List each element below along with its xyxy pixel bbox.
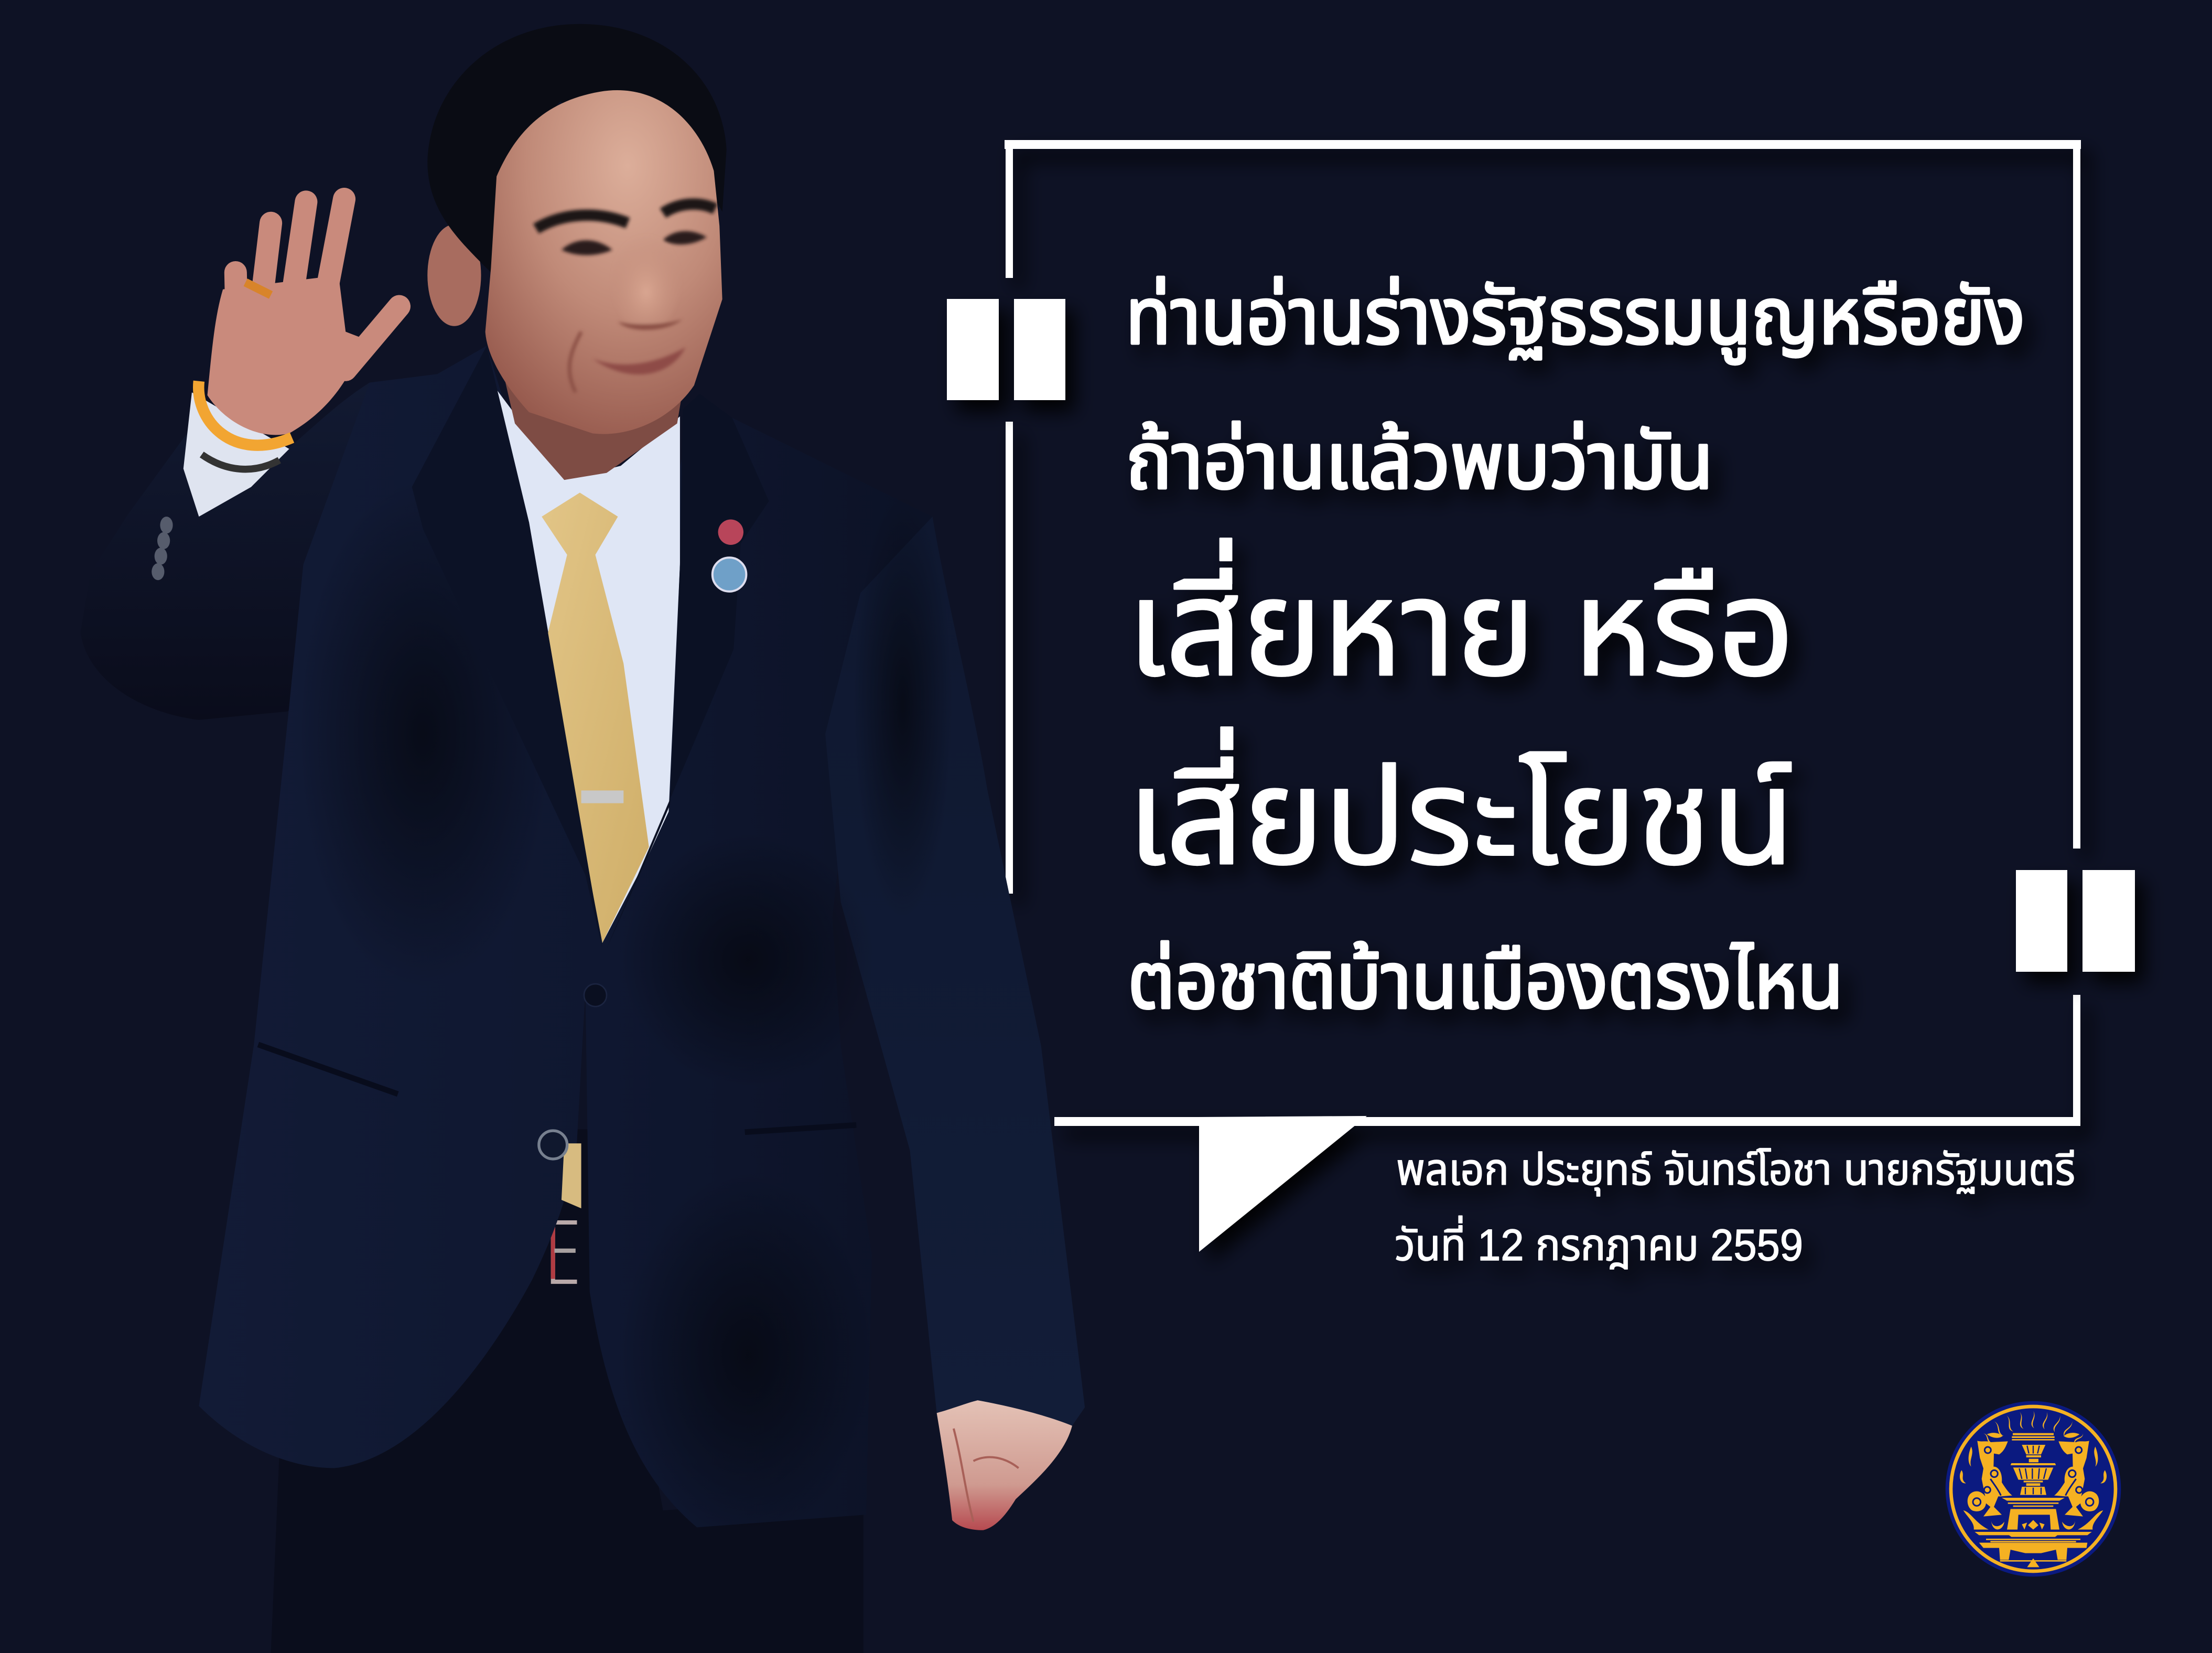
raised arm sleeve (80, 382, 451, 720)
right lapel (607, 394, 769, 949)
left eye (562, 240, 612, 255)
ring (245, 282, 271, 295)
seal base pedestal (1974, 1532, 2092, 1567)
lower hand (937, 1400, 1072, 1530)
speech frame (1005, 140, 2081, 1252)
shirt (488, 378, 680, 943)
shirt cuff (184, 392, 289, 517)
left pocket (258, 1045, 398, 1094)
seal flames (1982, 1411, 2084, 1445)
neck (494, 332, 684, 480)
sleeve buttons (152, 517, 173, 580)
quote line 4 large: เสี่ยประโยชน์ (1127, 726, 1795, 893)
date: วันที่ 12 กรกฎาคม 2559 (1395, 1216, 1803, 1270)
seal right lion (2054, 1441, 2107, 1530)
hair (427, 24, 727, 275)
wristband black (202, 455, 279, 469)
quote line 5: ต่อชาติบ้านเมืองตรงไหน (1128, 937, 1843, 1025)
seal disc (1946, 1401, 2121, 1576)
seal left lion (1960, 1441, 2012, 1530)
nostril shadow (618, 319, 683, 330)
closing quote mark (2016, 870, 2135, 972)
quote line 1: ท่านอ่านร่างรัฐธรรมนูญหรือยัง (1126, 272, 2025, 364)
jacket shading (296, 480, 952, 1539)
seal urn (2002, 1433, 2065, 1530)
right pocket (745, 1125, 856, 1132)
right sleeve (825, 517, 1085, 1426)
facial features (536, 204, 715, 392)
tie clip (581, 790, 623, 803)
quote line 2: ถ้าอ่านแล้วพบว่ามัน (1126, 417, 1713, 505)
quote line 3 large: เสี่ยหาย หรือ (1127, 538, 1795, 704)
quote text (1126, 272, 2025, 1025)
raised hand (208, 199, 399, 435)
tie end below button (562, 1143, 581, 1208)
speaker name: พลเอก ประยุทธ์ จันทร์โอชา นายกรัฐมนตรี (1396, 1145, 2075, 1196)
seal urn detail lines (2019, 1446, 2046, 1494)
seal gold ring (1951, 1407, 2116, 1571)
seal left lion swirl detail (1973, 1447, 2001, 1506)
face (485, 90, 722, 434)
nose highlight (612, 234, 680, 330)
seal of the government (1946, 1401, 2121, 1576)
figure: man in navy suit waving (80, 24, 1085, 1653)
lower hand finger creases (954, 1429, 1019, 1522)
trousers (271, 1129, 864, 1653)
left lapel (412, 346, 602, 949)
lapel pin red (718, 520, 743, 545)
right eyebrow (663, 204, 715, 213)
belt buckle (553, 1222, 577, 1282)
upper jacket button (584, 984, 607, 1006)
speech bubble tail (1199, 1116, 1367, 1252)
opening quote mark (947, 299, 1065, 400)
mouth (592, 347, 686, 374)
ear (427, 224, 481, 326)
tie (542, 492, 649, 943)
lapel pin blue (713, 557, 746, 592)
orange wristband (199, 381, 292, 445)
lower jacket button (539, 1131, 567, 1159)
attribution (1395, 1145, 2075, 1270)
jacket body (199, 346, 933, 1527)
cheek crease (569, 332, 581, 392)
right eye (663, 231, 707, 244)
left eyebrow (536, 215, 628, 229)
